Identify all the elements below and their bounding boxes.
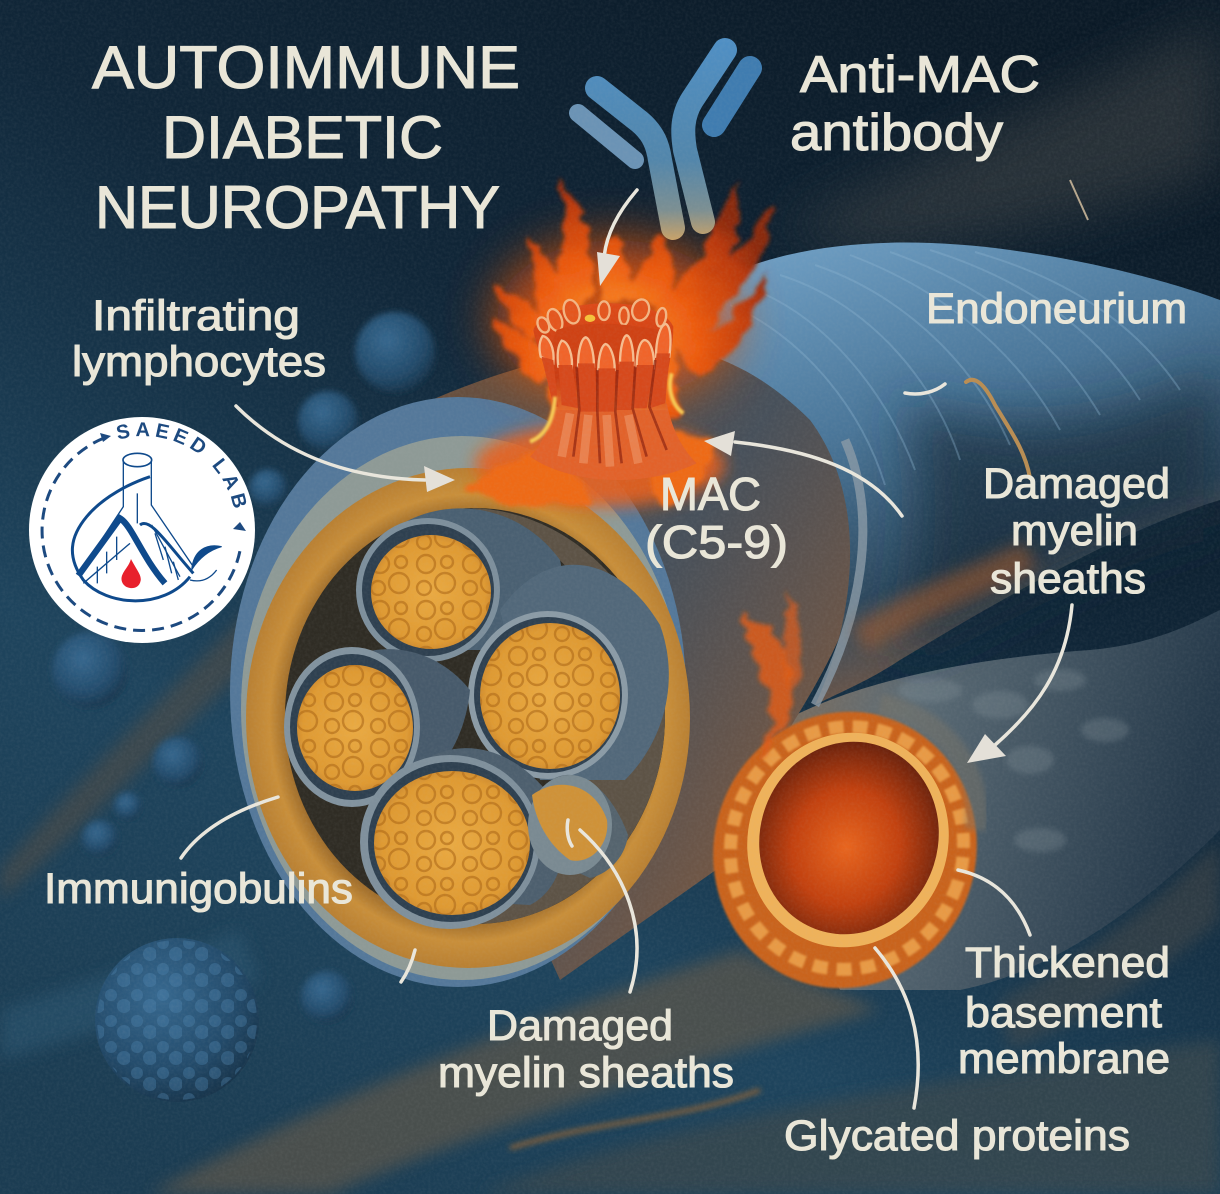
fascicle small damaged <box>528 775 628 878</box>
floating blue cells <box>52 312 435 1102</box>
pore columns <box>542 353 670 412</box>
title <box>92 34 520 241</box>
lumen <box>734 718 964 958</box>
label: MAC: MAC <box>660 468 761 520</box>
fascicle left <box>284 647 470 807</box>
rim highlight <box>241 436 683 980</box>
nerve cross-section <box>230 397 690 987</box>
title: DIABETIC <box>162 104 443 171</box>
label: immunigobulins: Immunigobulins <box>44 865 353 913</box>
fascicle right <box>468 565 669 780</box>
arrow: to MAC from antibody <box>597 190 637 286</box>
large nerve body <box>420 340 862 980</box>
label: damaged myelin sheaths bottom <box>438 1002 734 1097</box>
vessel cross-section <box>677 677 1013 1023</box>
label: thickened basement membrane: basement <box>965 989 1162 1037</box>
label: anti-MAC antibody: Anti-MAC <box>800 46 1040 104</box>
arrow: MAC <box>704 431 902 516</box>
lower flame wash <box>475 423 725 507</box>
title: AUTOIMMUNE <box>92 34 520 101</box>
antibody right light chain <box>714 68 750 125</box>
crown front fingers <box>540 324 671 370</box>
glowing skirt highlights <box>530 373 683 442</box>
flames <box>465 178 802 760</box>
inner cavity <box>285 508 665 924</box>
logo dashed ring <box>42 438 241 630</box>
label: damaged myelin sheaths right <box>983 460 1170 603</box>
skirt streaks <box>562 413 638 467</box>
label: thickened basement membrane: membrane <box>958 1035 1170 1083</box>
label: MAC: (C5-9) <box>645 516 788 568</box>
logo blood drop <box>121 559 141 588</box>
label: thickened basement membrane <box>958 939 1170 1083</box>
arrow: damaged myelin right <box>967 605 1072 763</box>
fascicle bottom <box>360 748 564 929</box>
antibody right heavy chain <box>683 50 725 222</box>
flame glow <box>495 240 735 400</box>
vessel outer wall <box>677 677 1013 1023</box>
crown back <box>533 303 673 410</box>
lower flame tongues <box>465 433 715 505</box>
MAC pore <box>530 298 697 480</box>
vessel upper-right grey wash <box>880 705 976 830</box>
label: MAC <box>645 468 788 568</box>
crown back fingers <box>535 298 668 334</box>
label: infiltrating lymphocytes: lymphocytes <box>72 338 326 386</box>
label: infiltrating lymphocytes: Infiltrating <box>92 292 300 340</box>
label: glycated proteins: Glycated proteins <box>784 1112 1130 1160</box>
title: NEUROPATHY <box>95 174 500 241</box>
golden annulus <box>246 468 690 968</box>
label: endoneurium: Endoneurium <box>926 285 1187 333</box>
cavity brown wall <box>385 508 665 924</box>
fascicle top <box>356 508 562 662</box>
logo disc <box>29 417 255 643</box>
flames near vessel <box>742 590 802 760</box>
antibody icon <box>578 50 750 228</box>
outer rim <box>230 397 686 987</box>
label: damaged myelin sheaths right: sheaths <box>990 555 1146 603</box>
mark: annulus tick <box>401 950 415 982</box>
logo flask and DNA <box>72 453 222 601</box>
antibody left heavy chain <box>597 88 673 228</box>
label: damaged myelin sheaths bottom: Damaged <box>487 1002 673 1050</box>
label: anti-MAC antibody <box>790 46 1040 162</box>
logo: Saeed Lab <box>29 417 255 643</box>
vessel bead ring <box>699 696 995 1000</box>
arrow: damaged myelin bottom <box>567 820 637 992</box>
arrow: infiltrating lymphocytes <box>236 406 455 492</box>
label: thickened basement membrane: Thickened <box>965 939 1170 987</box>
endoneurium marks <box>905 380 1030 478</box>
flame tongues <box>492 178 771 420</box>
label: damaged myelin sheaths right: Damaged <box>983 460 1170 508</box>
yellow centre <box>585 315 595 322</box>
logo arc guide <box>118 436 235 514</box>
label: damaged myelin sheaths right: myelin <box>1011 507 1138 555</box>
arrow: immunoglobulins <box>181 797 278 858</box>
antibody left light chain <box>578 113 635 160</box>
column lines <box>573 360 667 463</box>
endoneurium upper tube <box>690 243 1220 705</box>
arrow: glycated proteins <box>875 948 918 1108</box>
label: anti-MAC antibody: antibody <box>790 104 1003 162</box>
pore skirt <box>530 400 697 480</box>
arrow: thickened membrane <box>958 870 1030 935</box>
blood vessel tube <box>730 610 1220 990</box>
vessel inner ring <box>720 706 976 974</box>
label: damaged myelin sheaths bottom: myelin sheaths <box>438 1049 734 1097</box>
logo lettering: SAEED LAB <box>116 422 246 508</box>
label: infiltrating lymphocytes <box>72 292 326 386</box>
logo arrowheads <box>100 433 246 531</box>
